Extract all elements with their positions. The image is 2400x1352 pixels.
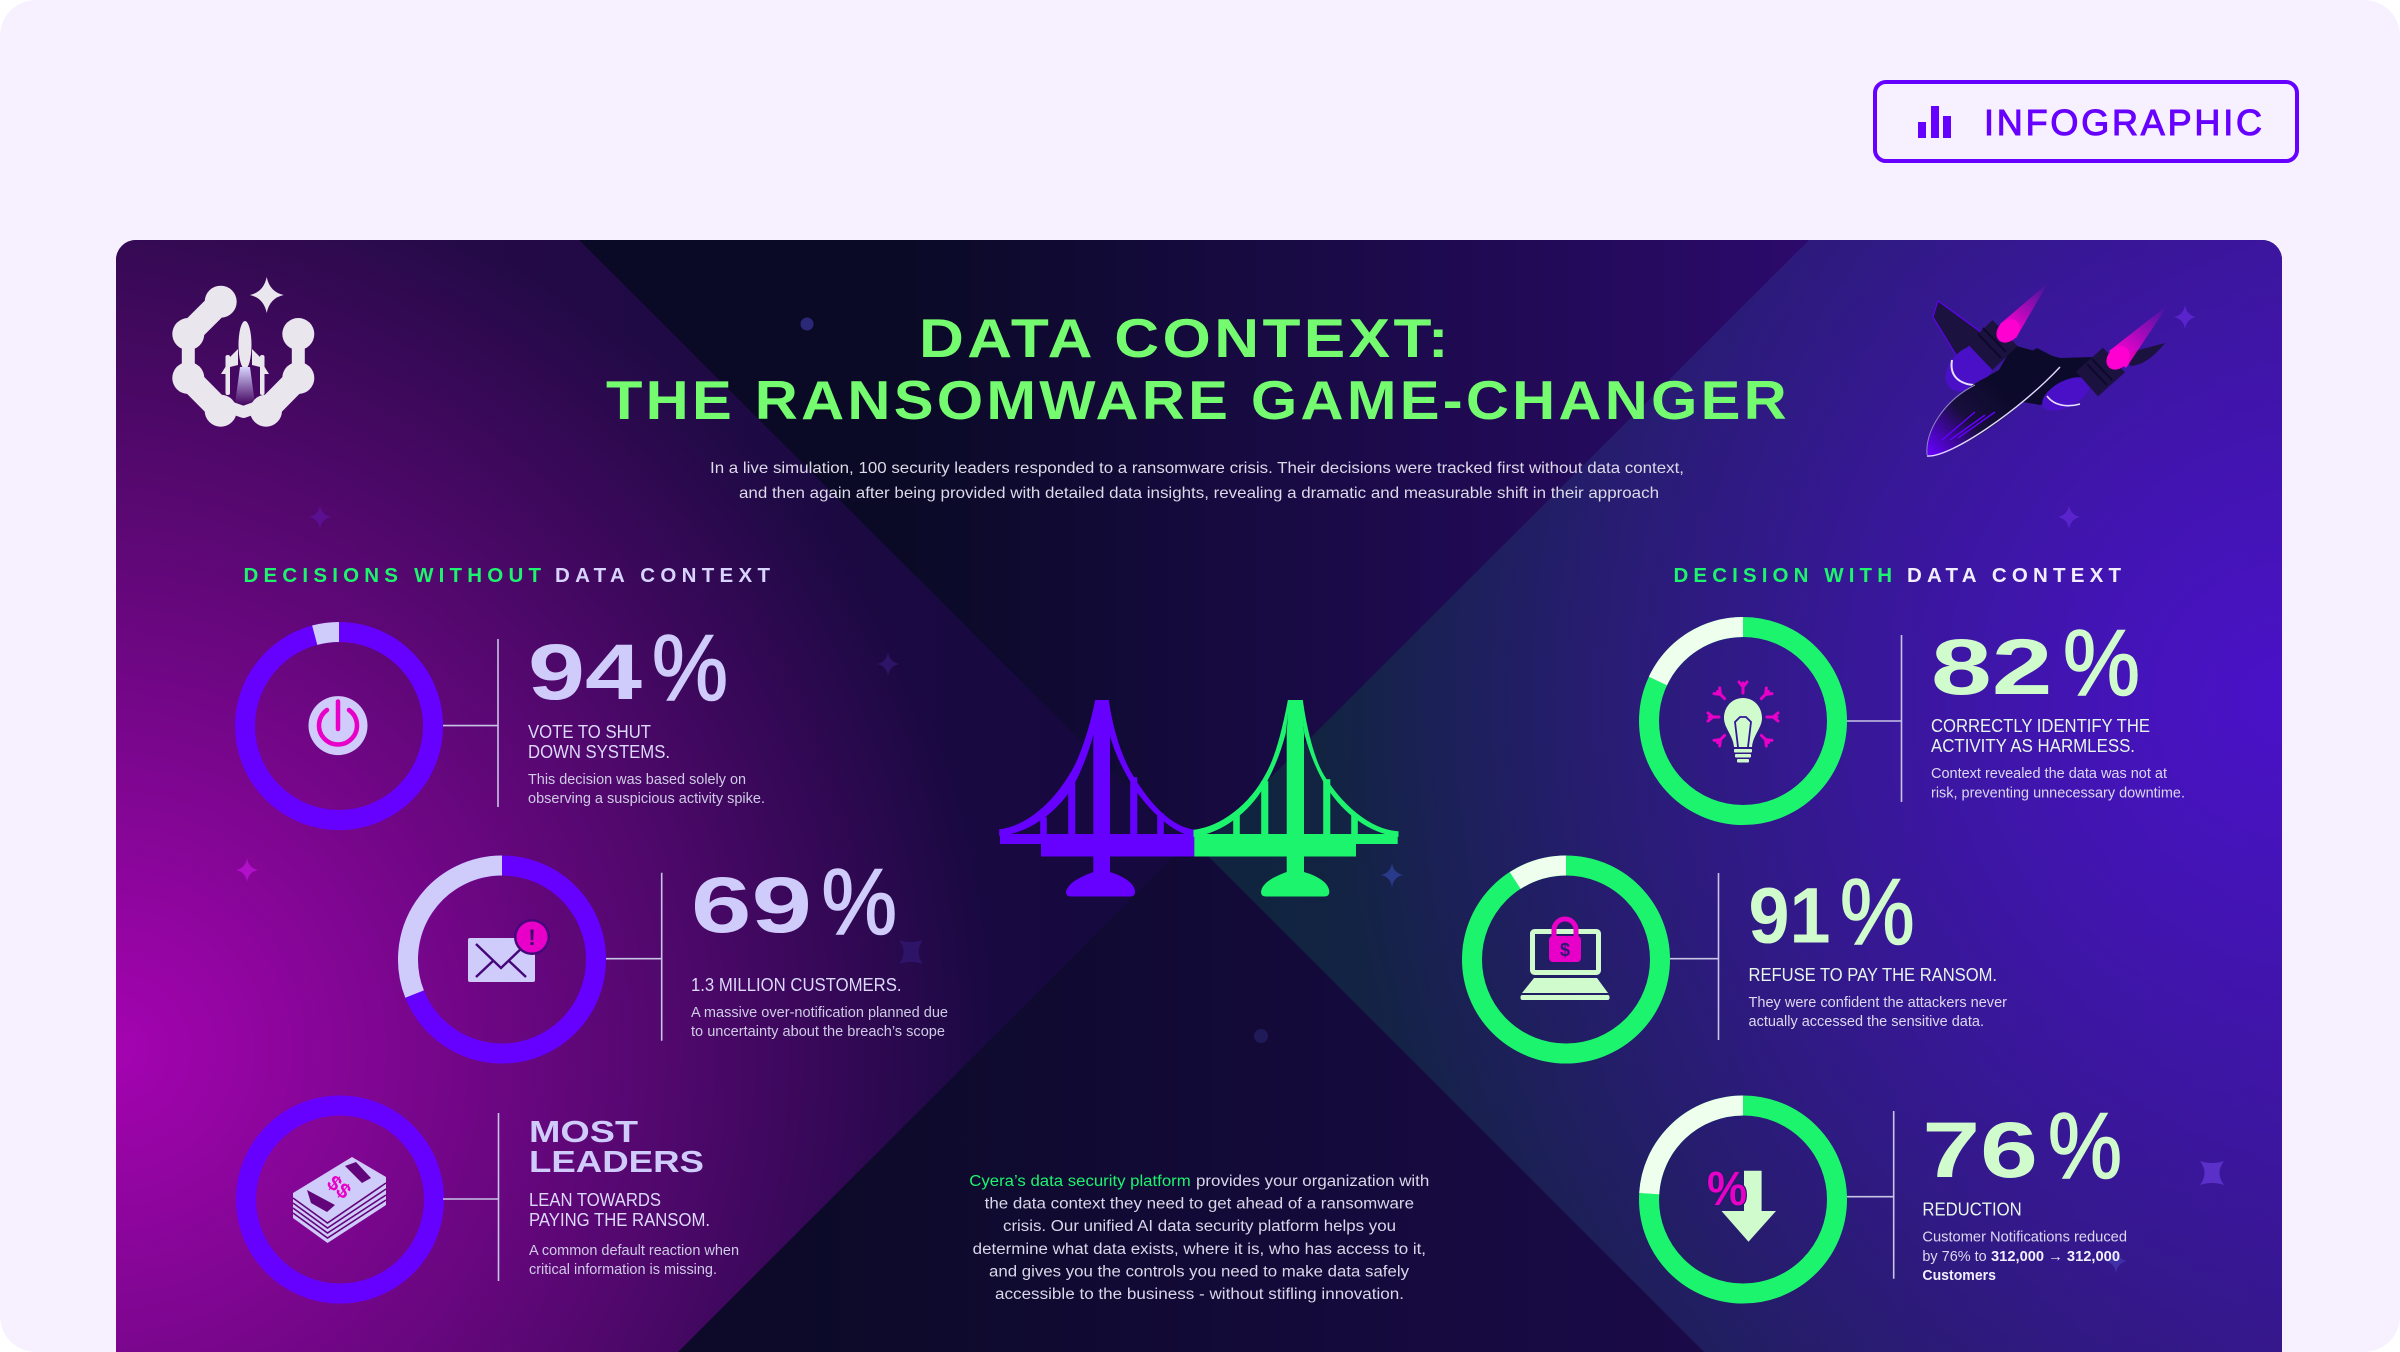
stat: 91 percent <box>1472 859 2007 1054</box>
right wing <box>2127 343 2165 366</box>
icon: percent with down arrow: % <box>1707 1163 1747 1216</box>
stat text <box>1748 859 2007 1030</box>
icon: stack of money <box>293 1157 386 1243</box>
hull <box>1927 348 2060 456</box>
stat text: REDUCTION <box>1922 1200 2022 1220</box>
heading: decisions without data context: DATA CONTEXT <box>555 564 770 587</box>
stat text: PAYING THE RANSOM. <box>529 1210 710 1230</box>
lower engines <box>1936 335 2004 401</box>
engines <box>1980 333 2005 357</box>
heading: decision with data context: DATA CONTEXT <box>1907 564 2121 587</box>
stat text: LEAN TOWARDS <box>529 1190 661 1210</box>
stat text: % <box>652 615 728 720</box>
heading: decision with data context <box>1674 564 2121 587</box>
text block: cyera platform: crisis. Our unified AI data security platform helps you <box>1003 1218 1396 1235</box>
stat text: % <box>2063 610 2140 715</box>
icon: envelope alert <box>468 919 550 982</box>
stat text: MOST <box>529 1114 638 1149</box>
stat text: by 76% to <box>1922 1249 1987 1265</box>
stat: 82 percent <box>1649 610 2185 815</box>
stat text <box>528 615 765 807</box>
background sparkles and dots <box>236 305 2224 1273</box>
stat text <box>691 849 948 1040</box>
title: THE RANSOMWARE GAME-CHANGER <box>606 369 1790 431</box>
text block: cyera platform: Cyera’s data security platform <box>969 1173 1191 1190</box>
icon: light bulb <box>1708 682 1778 762</box>
heading: decision with data context: DECISION WITH <box>1674 564 1892 587</box>
purple bridge half <box>1000 700 1194 896</box>
donut chart: 76 percent <box>1649 1106 1837 1294</box>
donut chart: 94 percent <box>245 632 433 820</box>
icon: bar chart <box>1918 106 1951 138</box>
cross beam <box>1985 345 2095 405</box>
stat text: critical information is missing. <box>529 1262 717 1278</box>
stat: 94 percent <box>245 615 765 820</box>
stat text: Context revealed the data was not at <box>1931 766 2167 782</box>
stat text: 82 <box>1931 622 2052 711</box>
text block: cyera platform: determine what data exists, where it is, who has access to it, <box>973 1241 1426 1258</box>
icon: percent with down arrow <box>1707 1163 1776 1242</box>
flames <box>2000 283 2048 338</box>
stat text: % <box>2048 1093 2122 1198</box>
stat text: 94 <box>528 627 642 716</box>
text block: cyera platform: and gives you the controls you need to make data safely <box>989 1264 1409 1280</box>
title: DATA CONTEXT: <box>919 307 1452 369</box>
donut chart: 69 percent <box>408 866 596 1054</box>
stat text: A massive over-notification planned due <box>691 1005 948 1021</box>
subtitle <box>710 460 1684 502</box>
stat text: 1.3 MILLION CUSTOMERS. <box>691 975 902 995</box>
badge: infographic <box>1875 82 2297 161</box>
stat text: Customer Notifications reduced <box>1922 1230 2127 1246</box>
stat text: ACTIVITY AS HARMLESS. <box>1931 736 2135 756</box>
icon: power <box>308 696 368 755</box>
panel: infographic card <box>116 240 2282 1352</box>
stat text <box>1922 1093 2127 1284</box>
stat: most leaders <box>246 1106 739 1294</box>
stat text: VOTE TO SHUT <box>528 722 651 742</box>
stat text: 312,000 → 312,000 <box>1991 1249 2120 1265</box>
subtitle: In a live simulation, 100 security leaders responded to a ransomware crisis. Their decisions were tracked first without data context, <box>710 460 1684 477</box>
ring chart: most leaders <box>246 1106 434 1294</box>
icon: stack of money: $$ <box>322 1171 355 1204</box>
stat: 69 percent <box>408 849 948 1054</box>
stat text <box>529 1114 739 1278</box>
icon: locked laptop <box>1520 919 1610 1000</box>
stat text: observing a suspicious activity spike. <box>528 791 765 807</box>
stat text: actually accessed the sensitive data. <box>1748 1014 1984 1030</box>
subtitle: and then again after being provided with detailed data insights, revealing a dramatic and measurable shift in their approach <box>739 485 1659 502</box>
badge label: INFOGRAPHIC <box>1984 102 2262 143</box>
stat text: They were confident the attackers never <box>1748 995 2007 1011</box>
text block: cyera platform: accessible to the business - without stifling innovation. <box>995 1286 1404 1303</box>
stat text: CORRECTLY IDENTIFY THE <box>1931 716 2150 736</box>
green bridge half <box>1194 700 1398 896</box>
stat text: Customers <box>1922 1268 1996 1284</box>
heading: decisions without data context: DECISIONS WITHOUT <box>244 564 541 587</box>
stat text: to uncertainty about the breach’s scope <box>691 1024 945 1040</box>
stat text: % <box>822 849 897 954</box>
stat text: A common default reaction when <box>529 1243 739 1259</box>
stat text: risk, preventing unnecessary downtime. <box>1931 786 2185 802</box>
icon: locked laptop: $ <box>1560 940 1570 960</box>
text block: cyera platform: the data context they need to get ahead of a ransomware <box>985 1196 1414 1213</box>
heading: decisions without data context <box>244 564 770 587</box>
stat: 76 percent <box>1649 1093 2127 1294</box>
stat text: LEADERS <box>529 1144 704 1179</box>
text block: cyera platform <box>969 1173 1429 1303</box>
stat text <box>1931 610 2185 802</box>
donut chart: 91 percent <box>1472 866 1660 1054</box>
stat text: 69 <box>691 860 812 949</box>
stat text: This decision was based solely on <box>528 772 746 788</box>
stat text: REFUSE TO PAY THE RANSOM. <box>1748 965 1997 985</box>
stat text: % <box>1840 859 1915 964</box>
title <box>606 307 1790 431</box>
icon: spacecraft <box>1927 283 2168 456</box>
stat text: 76 <box>1922 1105 2038 1194</box>
stat text: DOWN SYSTEMS. <box>528 742 670 762</box>
icon: bridge <box>1000 700 1398 896</box>
icon: envelope alert: ! <box>528 925 536 950</box>
left wing <box>1933 301 1982 358</box>
stat text: 91 <box>1748 871 1830 960</box>
icon: rocket logo <box>172 277 314 427</box>
donut chart: 82 percent <box>1649 627 1837 815</box>
text block: cyera platform: provides your organization with <box>1196 1173 1429 1190</box>
